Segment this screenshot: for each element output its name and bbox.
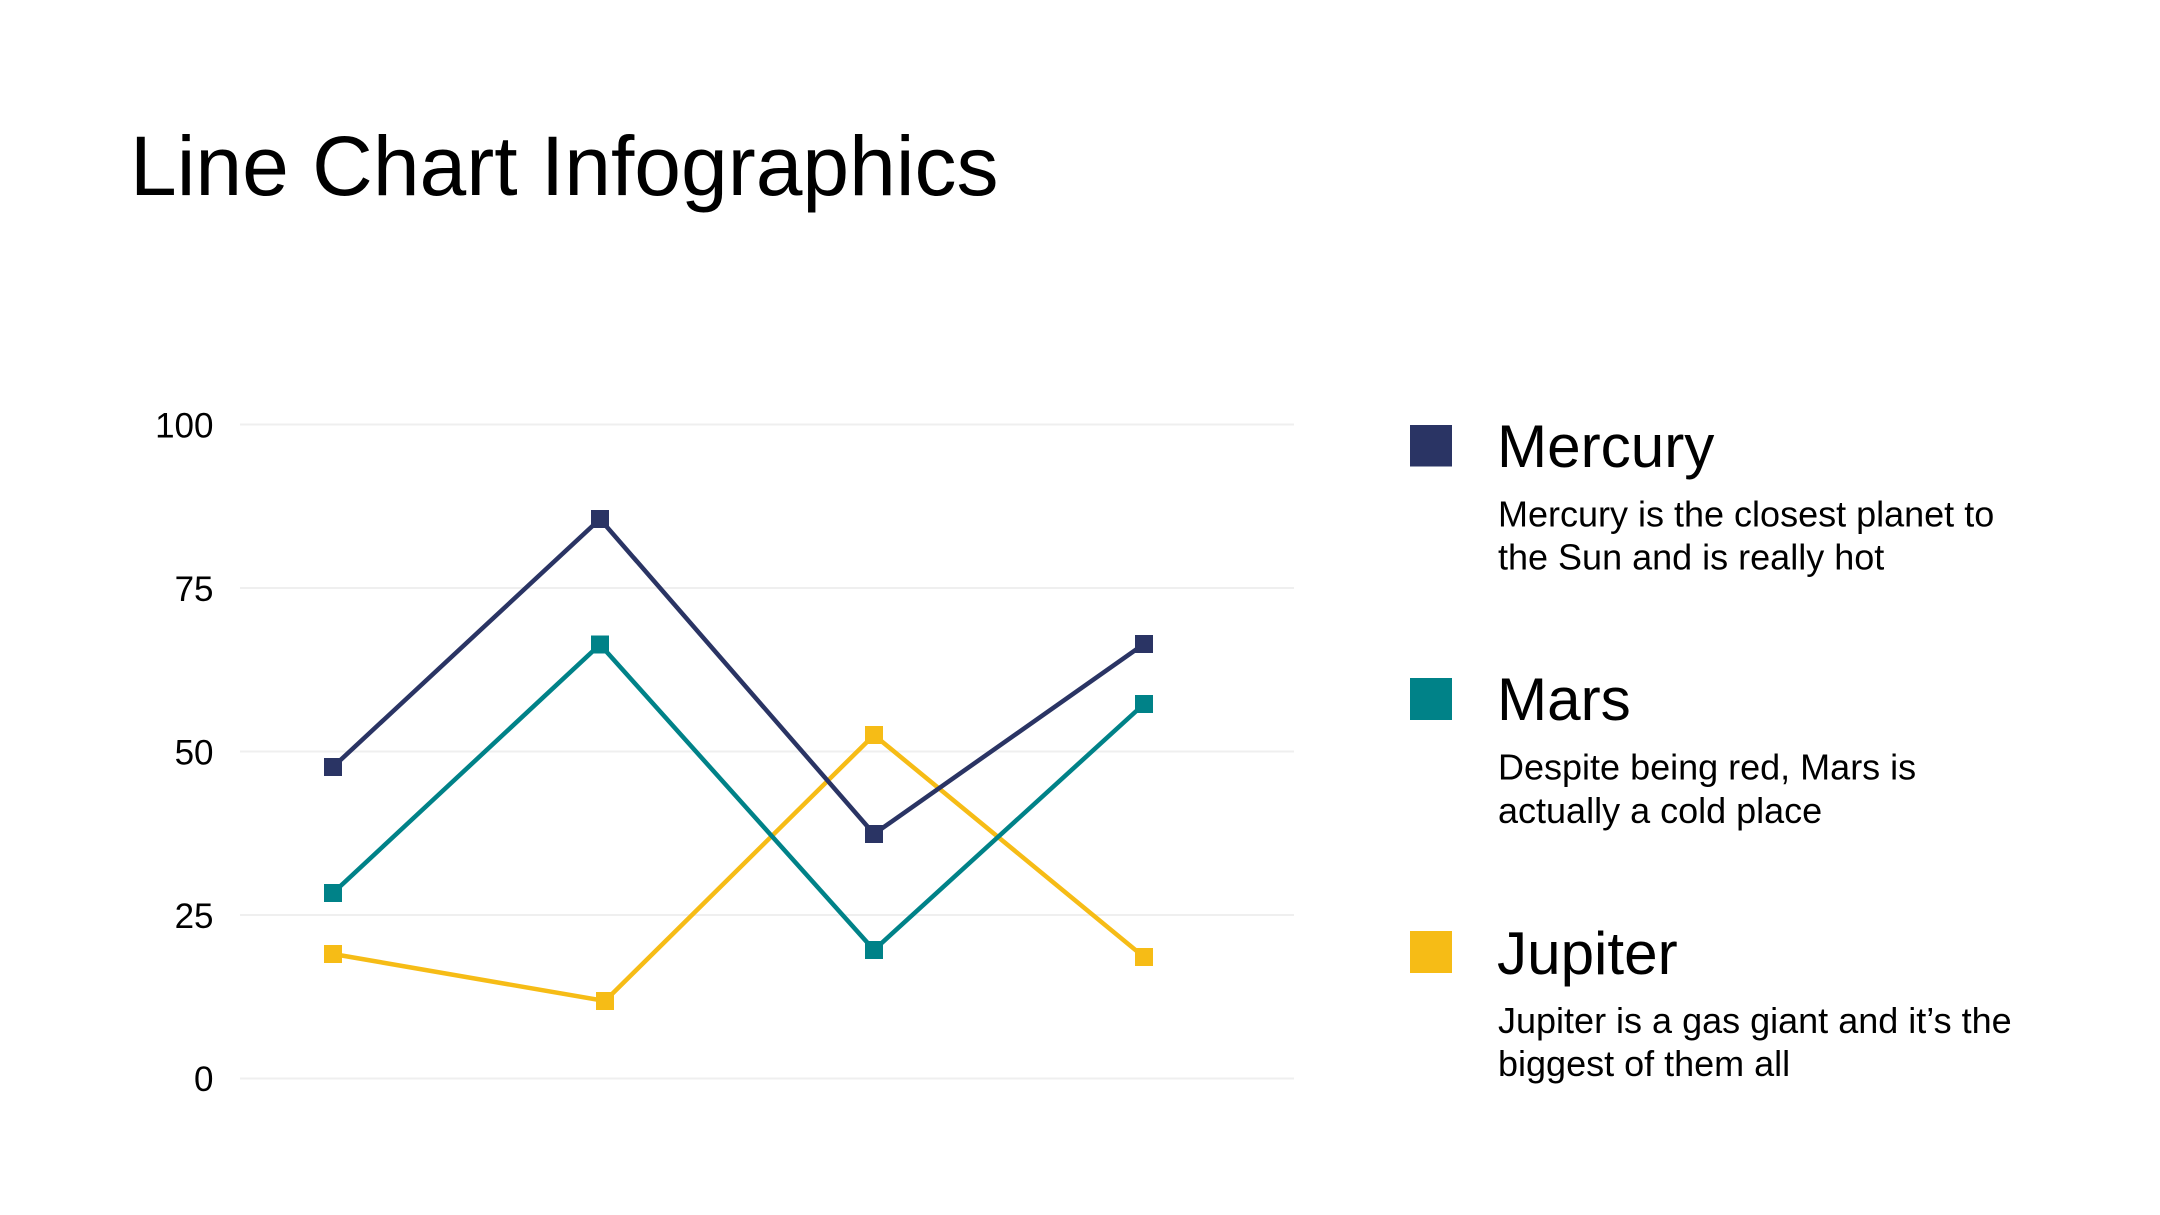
heading: Jupiter: Jupiter: [1497, 920, 1678, 987]
series: Mars: [324, 636, 1153, 959]
y axis labels: 75: [175, 570, 214, 609]
y axis labels: 100: [155, 406, 214, 446]
y axis labels: 0: [194, 1060, 214, 1099]
heading: Mercury: Mercury: [1497, 413, 1714, 480]
description: Jupiter: Jupiter is a gas giant and it’s the: [1498, 1000, 2012, 1041]
series: Jupiter: [324, 726, 1153, 1010]
legend item: Mercury: [1410, 413, 1994, 578]
heading: Mars: Mars: [1497, 666, 1631, 733]
description: Mercury: Mercury is the closest planet to: [1498, 494, 1994, 534]
y axis labels: 25: [175, 897, 214, 936]
description: Mars: actually a cold place: [1498, 790, 1822, 831]
icon: yellow square: [1410, 931, 1452, 973]
series: Mercury: [324, 510, 1153, 843]
icon: teal square: [1410, 678, 1452, 720]
icon: navy square: [1410, 425, 1452, 466]
y axis labels: [155, 406, 214, 1099]
description: Mercury: the Sun and is really hot: [1498, 536, 1884, 578]
y axis labels: 50: [175, 734, 214, 772]
title: Line Chart Infographics: [130, 119, 999, 213]
description: Mars: Despite being red, Mars is: [1498, 746, 1916, 788]
legend item: Mars: [1410, 666, 1916, 831]
legend item: Jupiter: [1410, 920, 2012, 1084]
description: Jupiter: biggest of them all: [1498, 1043, 1790, 1084]
line chart: [155, 406, 1294, 1099]
